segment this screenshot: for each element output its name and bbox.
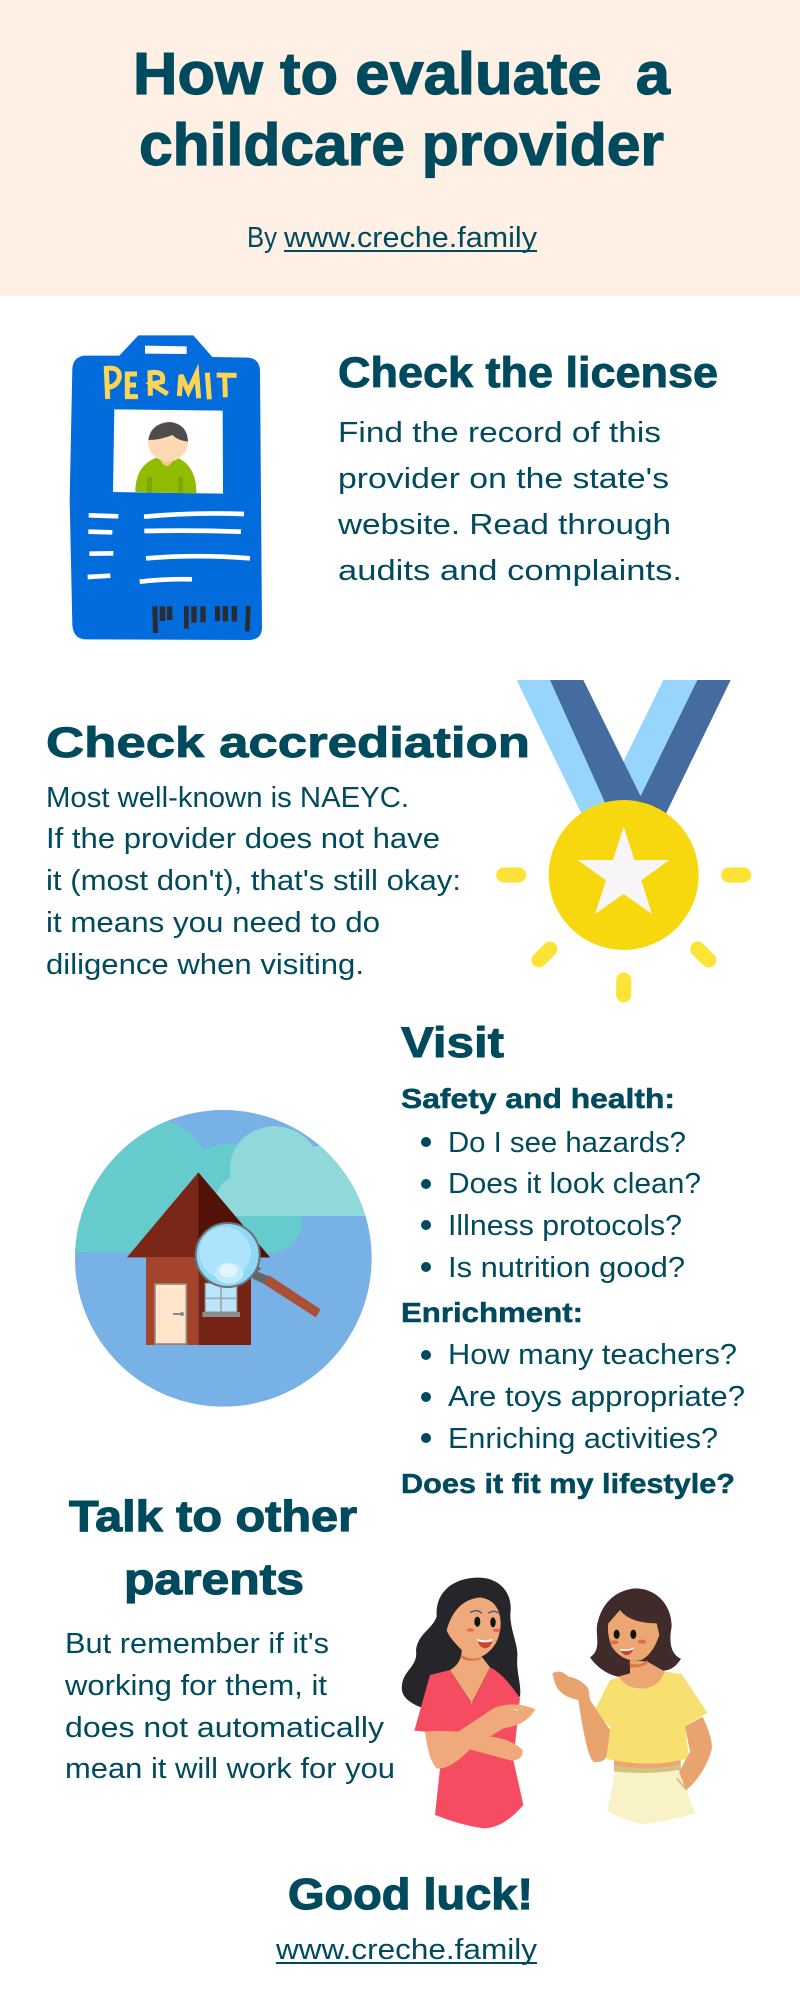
- text block: check accreditation: If the provider does not have: [46, 823, 440, 855]
- text block: check the license: Check the license: [338, 349, 718, 397]
- text block: check accreditation: [46, 719, 530, 981]
- text block: check the license: website. Read through: [337, 509, 671, 541]
- text block: visit: Does it fit my lifestyle?: [401, 1468, 735, 1499]
- text block: visit: Visit: [401, 1019, 504, 1067]
- text block: check accreditation: Check accrediation: [46, 719, 530, 767]
- text block: check accreditation: Most well-known is NAEYC.: [46, 782, 409, 814]
- woman in yellow: [552, 1588, 712, 1824]
- text block: talk to other parents: Talk to other: [69, 1492, 357, 1541]
- byline: www.creche.family: [283, 222, 538, 254]
- icon: house with magnifying glass: [70, 1110, 377, 1407]
- bullet list: safety: Illness protocols?: [448, 1210, 682, 1242]
- bullet list: safety: Do I see hazards?: [448, 1127, 686, 1159]
- title: childcare provider: [139, 112, 664, 178]
- icon: permit badge: [70, 335, 262, 640]
- bullet list: safety: [421, 1127, 701, 1284]
- title: How to evaluate a: [133, 41, 671, 107]
- text block: visit: Enrichment:: [401, 1297, 583, 1328]
- text block: talk to other parents: mean it will work for you: [65, 1753, 395, 1785]
- bullet list: enrichment: Enriching activities?: [448, 1423, 718, 1455]
- byline: By: [247, 222, 277, 254]
- text block: visit: Safety and health:: [401, 1083, 675, 1114]
- closing heading: Good luck!: [288, 1870, 533, 1919]
- bullet list: enrichment: [421, 1339, 745, 1455]
- text block: check the license: [337, 349, 718, 587]
- icon: medal: [504, 680, 744, 995]
- title: [133, 41, 671, 178]
- bullet list: safety: Does it look clean?: [448, 1168, 701, 1200]
- icon: two women talking: [402, 1578, 712, 1828]
- bullet list: enrichment: How many teachers?: [448, 1339, 737, 1371]
- bullet list: enrichment: Are toys appropriate?: [448, 1381, 745, 1413]
- text block: talk to other parents: [64, 1492, 395, 1785]
- text block: talk to other parents: does not automatically: [65, 1712, 385, 1744]
- text block: talk to other parents: But remember if it's: [65, 1628, 329, 1660]
- panel: header: [0, 0, 800, 296]
- text block: talk to other parents: working for them, it: [64, 1670, 327, 1702]
- text block: check the license: Find the record of this: [338, 417, 661, 449]
- closing link: www.creche.family: [275, 1934, 538, 1966]
- text block: talk to other parents: parents: [124, 1555, 304, 1604]
- text block: check accreditation: it (most don't), that's still okay:: [46, 865, 461, 897]
- text block: check accreditation: diligence when visiting.: [46, 949, 364, 981]
- text block: check the license: audits and complaints.: [338, 555, 682, 587]
- bullet list: safety: Is nutrition good?: [448, 1252, 685, 1284]
- text block: check accreditation: it means you need to do: [46, 907, 380, 939]
- text block: check the license: provider on the state's: [338, 463, 669, 495]
- text block: visit: [401, 1019, 745, 1499]
- woman in red: [402, 1578, 535, 1828]
